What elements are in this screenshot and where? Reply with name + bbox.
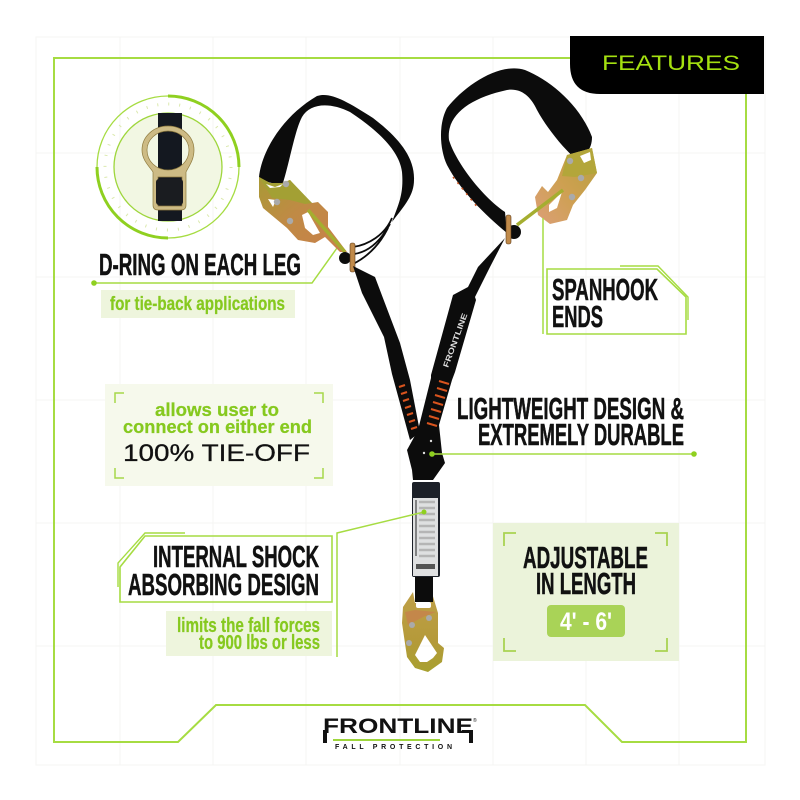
left loop webbing [259, 95, 414, 222]
right strap and pad [407, 238, 505, 480]
bottom hook [402, 592, 444, 672]
shock pack [412, 482, 440, 577]
callout: fall forces: to 900 lbs or less [199, 632, 320, 654]
left hook [259, 177, 347, 252]
heading: D-ring on each leg: D-RING ON EACH LEG [99, 247, 301, 282]
leader: lightweight [429, 451, 697, 457]
lanyard product illustration [259, 68, 597, 672]
leader: shock absorber [337, 510, 426, 657]
panel: internal shock absorbing design [118, 533, 332, 602]
logo: Frontline Fall Protection [323, 715, 477, 751]
features tab [570, 36, 764, 94]
callout: tie-back [101, 290, 295, 318]
panel: 100% tie-off: 100% TIE-OFF [123, 440, 310, 467]
panel: 100% tie-off: allows user to [155, 400, 279, 420]
panel: adjustable in length: IN LENGTH [536, 566, 636, 601]
panel: adjustable in length: ADJUSTABLE [523, 540, 648, 575]
callout: fall forces [166, 611, 332, 656]
frame outline [54, 58, 746, 742]
left strap [353, 266, 420, 440]
panel: 100% tie-off: connect on either end [123, 417, 312, 437]
heading: lightweight design [457, 391, 684, 452]
panel: spanhook ends: SPANHOOK [552, 272, 658, 307]
leader: D-ring [91, 248, 337, 286]
panel: 100% tie-off [105, 384, 333, 486]
logo: Frontline Fall Protection: ® [473, 717, 477, 724]
panel: internal shock absorbing design: ABSORBING DESIGN [128, 567, 319, 602]
panel: internal shock absorbing design: INTERNAL SHOCK [153, 539, 319, 574]
logo: Frontline Fall Protection: FRONTLINE [323, 715, 473, 738]
brand on pad: FRONTLINE [441, 311, 470, 369]
logo: Frontline Fall Protection: FALL PROTECTION [335, 744, 452, 751]
leader: spanhook [542, 218, 544, 334]
badge: 4-6 ft: 4' - 6' [560, 608, 612, 636]
panel: spanhook ends [547, 266, 688, 334]
right hook [535, 148, 597, 224]
badge: 4-6 ft [547, 605, 625, 637]
callout: tie-back: for tie-back applications [110, 294, 285, 315]
panel: adjustable in length [493, 523, 679, 661]
callout: fall forces: limits the fall forces [177, 615, 320, 637]
panel: spanhook ends: ENDS [552, 299, 603, 334]
features heading: FEATURES [602, 52, 740, 75]
right loop webbing [441, 68, 592, 233]
icon: D-ring detail circle [97, 96, 239, 238]
